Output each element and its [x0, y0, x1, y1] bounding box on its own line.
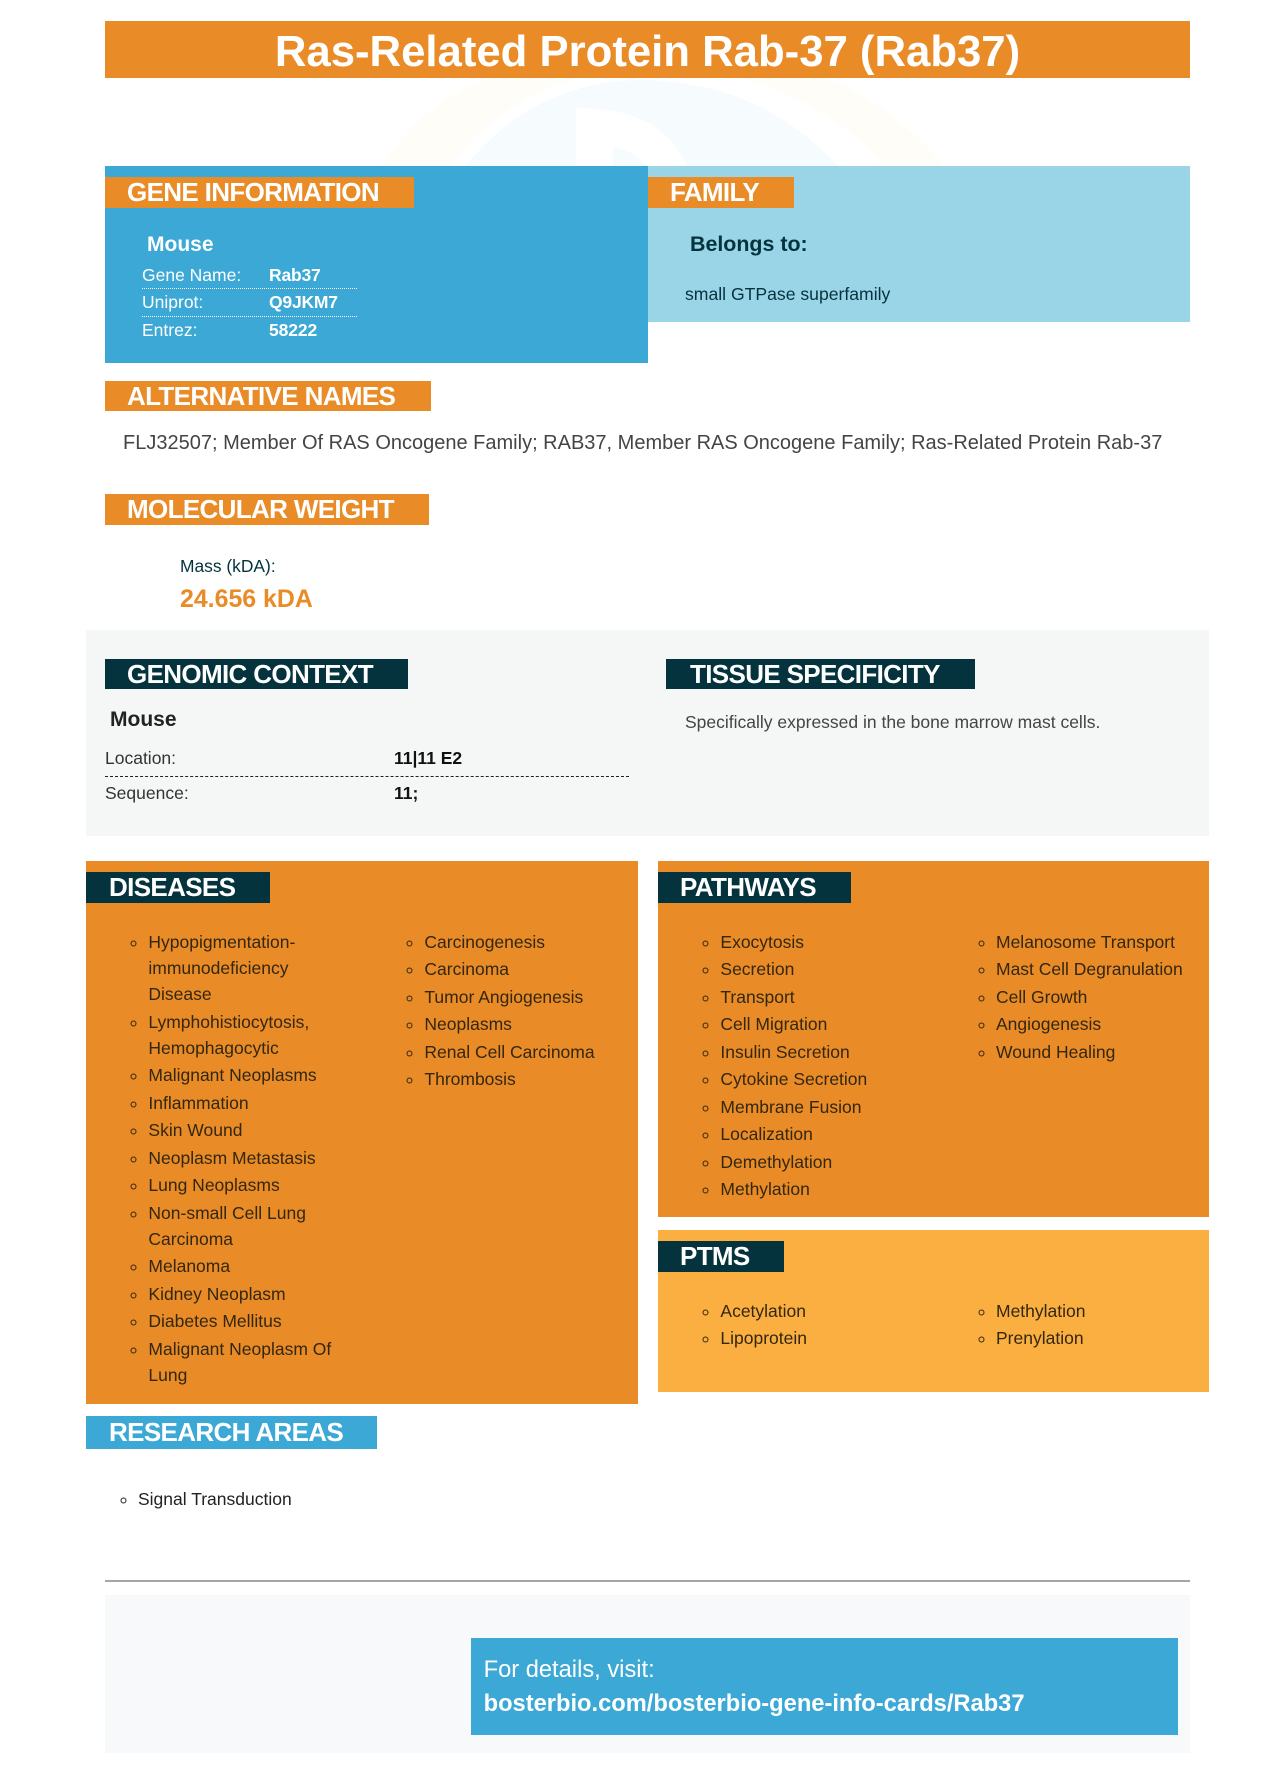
row: gene name: Gene Name: [142, 265, 241, 285]
list: diseases column 2: Carcinogenesis [424, 932, 545, 952]
alternative names text: FLJ32507; Member Of RAS Oncogene Family; RAB37, Member RAS Oncogene Family; Ras-Related Protein Rab-37 [123, 432, 1162, 454]
row: entrez [142, 320, 317, 340]
heading: genomic context: GENOMIC CONTEXT [127, 659, 373, 689]
row: gene name [142, 262, 357, 289]
list: diseases column 1: Hypopigmentation-immunodeficiency Disease [148, 932, 295, 1004]
heading: ptms [658, 1241, 784, 1272]
list: ptms column 1 [702, 1301, 807, 1348]
list: diseases column 1: Malignant Neoplasms [148, 1065, 317, 1085]
location row: 11|11 E2 [394, 748, 462, 768]
mass value: 24.656 kDA [180, 585, 313, 613]
gene information table [142, 265, 357, 340]
sequence row [105, 783, 418, 803]
list: ptms column 2: Methylation [996, 1301, 1086, 1321]
row: uniprot [142, 289, 357, 317]
list: diseases column 1: Kidney Neoplasm [148, 1284, 286, 1304]
location row: Location: [105, 748, 176, 768]
heading: research areas: RESEARCH AREAS [109, 1417, 343, 1447]
list: pathways column 2: Cell Growth [996, 987, 1087, 1007]
list: research areas: Signal Transduction [138, 1489, 292, 1509]
list: ptms column 2: Prenylation [996, 1328, 1084, 1348]
list: pathways column 1: Methylation [720, 1179, 810, 1199]
panel: diseases [86, 861, 638, 1404]
list: pathways column 1: Transport [720, 987, 795, 1007]
list: pathways column 2: Angiogenesis [996, 1014, 1101, 1034]
row: gene name: Rab37 [269, 265, 321, 285]
list: pathways column 2 [978, 932, 1183, 1062]
heading: gene information: GENE INFORMATION [127, 177, 379, 207]
mass label: Mass (kDA): [180, 556, 276, 576]
list: diseases column 2: Neoplasms [424, 1014, 512, 1034]
list: diseases column 1 [130, 932, 332, 1384]
list: diseases column 2: Thrombosis [424, 1069, 516, 1089]
list: diseases column 1: Non-small Cell Lung Carcinoma [148, 1202, 306, 1248]
list: ptms column 2 [978, 1301, 1086, 1348]
heading: tissue specificity: TISSUE SPECIFICITY [690, 659, 940, 689]
list: diseases column 2: Renal Cell Carcinoma [424, 1042, 595, 1062]
list: diseases column 2: Tumor Angiogenesis [424, 987, 583, 1007]
species: mouse: Mouse [147, 233, 214, 256]
panel: pathways [658, 861, 1209, 1217]
list: diseases column 1: Malignant Neoplasm Of Lung [148, 1338, 331, 1384]
heading: family: FAMILY [670, 177, 759, 207]
list: pathways column 1: Localization [720, 1124, 813, 1144]
row: entrez: 58222 [269, 320, 317, 340]
list: pathways column 1: Demethylation [720, 1152, 832, 1172]
panel: genomic context and tissue specificity [86, 630, 1209, 836]
sequence row: 11; [394, 783, 418, 803]
callout line 1: For details, visit: [484, 1657, 655, 1683]
family value: small GTPase superfamily [685, 284, 890, 304]
list: pathways column 1: Membrane Fusion [720, 1097, 861, 1117]
callout url: bosterbio.com/bosterbio-gene-info-cards/Rab37 [484, 1691, 1025, 1717]
heading: ptms: PTMS [680, 1241, 750, 1271]
background watermark logo [466, 80, 838, 166]
title banner [105, 21, 1190, 78]
list: diseases column 1: Skin Wound [148, 1120, 242, 1140]
list: diseases column 2: Carcinoma [424, 959, 509, 979]
list: diseases column 1: Diabetes Mellitus [148, 1311, 282, 1331]
list: pathways column 1: Cell Migration [720, 1014, 827, 1034]
list: pathways column 2: Melanosome Transport [996, 932, 1175, 952]
list: pathways column 1 [702, 932, 867, 1199]
list: ptms column 1: Lipoprotein [720, 1328, 807, 1348]
callout: details link [471, 1638, 1178, 1735]
location row [105, 746, 629, 777]
list: pathways column 1: Cytokine Secretion [720, 1069, 867, 1089]
heading: pathways [658, 872, 851, 903]
panel: family [648, 166, 1190, 322]
row: uniprot: Uniprot: [142, 292, 203, 312]
heading: molecular weight: MOLECULAR WEIGHT [127, 494, 394, 524]
list: pathways column 1: Insulin Secretion [720, 1042, 850, 1062]
list: pathways column 1: Exocytosis [720, 932, 804, 952]
tissue specificity text: Specifically expressed in the bone marrow mast cells. [685, 712, 1100, 732]
list: diseases column 2 [406, 932, 595, 1089]
panel: footer [105, 1595, 1190, 1753]
heading: diseases: DISEASES [109, 872, 235, 902]
panel: gene information [105, 166, 648, 363]
list: diseases column 1: Lung Neoplasms [148, 1175, 280, 1195]
heading: alternative names: ALTERNATIVE NAMES [127, 381, 395, 411]
family label: Belongs to: [690, 232, 808, 256]
row: entrez: Entrez: [142, 320, 197, 340]
list: pathways column 1: Secretion [720, 959, 794, 979]
list: diseases column 1: Neoplasm Metastasis [148, 1148, 316, 1168]
list: pathways column 2: Mast Cell Degranulation [996, 959, 1183, 979]
title banner: Ras-Related Protein Rab-37 (Rab37) [275, 27, 1020, 76]
footer divider [105, 1580, 1190, 1582]
species: mouse: Mouse [110, 708, 177, 731]
heading: family [648, 177, 794, 208]
list: ptms column 1: Acetylation [720, 1301, 806, 1321]
sequence row: Sequence: [105, 783, 189, 803]
row: uniprot: Q9JKM7 [269, 292, 338, 312]
heading: pathways: PATHWAYS [680, 872, 816, 902]
list: diseases column 1: Lymphohistiocytosis, Hemophagocytic [148, 1012, 309, 1058]
list: diseases column 1: Inflammation [148, 1092, 249, 1112]
list: diseases column 1: Melanoma [148, 1256, 230, 1276]
heading: diseases [86, 872, 270, 903]
panel: ptms [658, 1230, 1209, 1392]
list: pathways column 2: Wound Healing [996, 1042, 1115, 1062]
